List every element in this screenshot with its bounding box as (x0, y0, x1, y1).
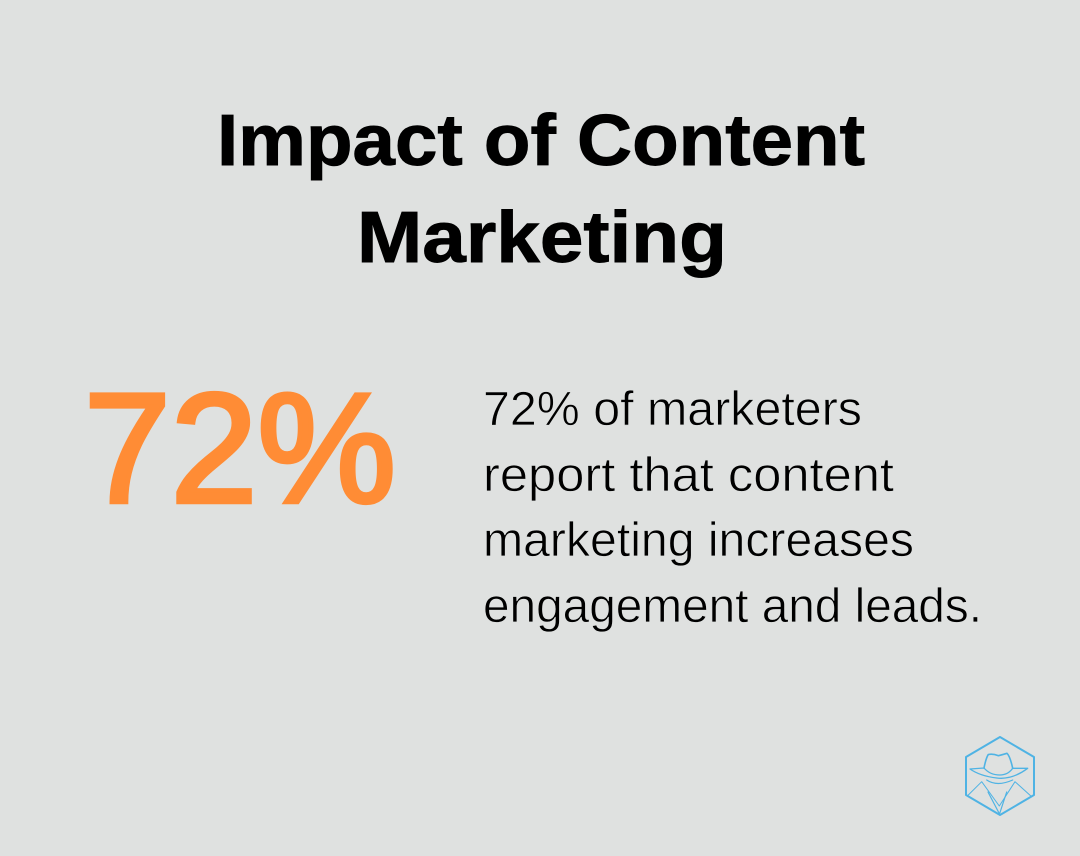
description text: engagement and leads. (483, 580, 982, 633)
icon: hexagon logo with spy hat (966, 737, 1034, 815)
big statistic: 72%: 72% (84, 362, 396, 536)
description text: report that content (483, 449, 894, 502)
title (217, 101, 865, 278)
description text (483, 383, 982, 633)
description text: marketing increases (483, 514, 914, 567)
title: Marketing (357, 198, 727, 278)
title: Impact of Content (217, 101, 865, 181)
description text: 72% of marketers (483, 383, 862, 436)
